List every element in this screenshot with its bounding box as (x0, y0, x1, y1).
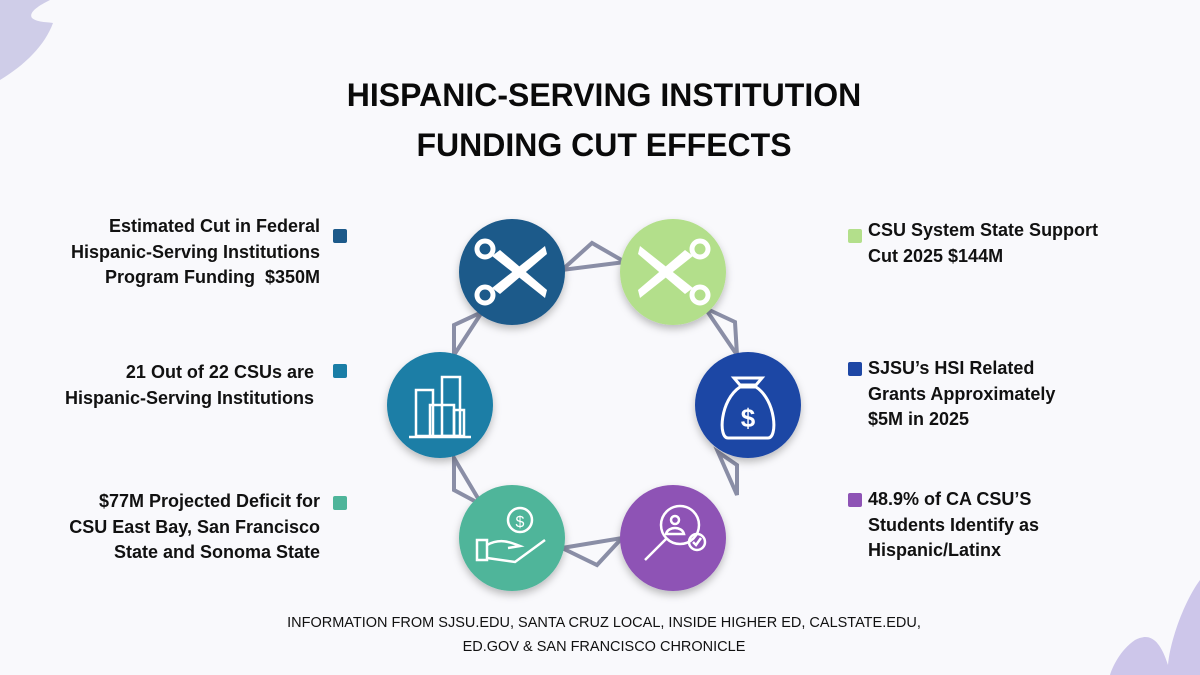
footer sources: INFORMATION FROM SJSU.EDU, SANTA CRUZ LOCAL, INSIDE HIGHER ED, CALSTATE.EDU, (287, 615, 921, 631)
right text 1: Cut 2025 $144M (868, 246, 1003, 266)
icon: magnifier profile (620, 485, 726, 591)
left text 2 (65, 362, 314, 408)
right text 2: $5M in 2025 (868, 409, 969, 429)
left text 1 (71, 216, 320, 287)
left text 3: State and Sonoma State (114, 542, 320, 562)
left text 1: Program Funding $350M (105, 267, 320, 287)
right text 2: SJSU’s HSI Related (868, 358, 1034, 378)
right text 1 (868, 220, 1098, 266)
left text 2: Hispanic-Serving Institutions (65, 388, 314, 408)
right text 3: 48.9% of CA CSU’S (868, 489, 1031, 509)
right text 1: CSU System State Support (868, 220, 1098, 240)
left text 1: Hispanic-Serving Institutions (71, 242, 320, 262)
icon: buildings (387, 352, 493, 458)
diagram: ring of icons: $ (741, 403, 756, 433)
right text 3: Hispanic/Latinx (868, 540, 1001, 560)
footer sources: ED.GOV & SAN FRANCISCO CHRONICLE (463, 639, 745, 655)
marker (848, 229, 862, 243)
title: FUNDING CUT EFFECTS (416, 127, 792, 163)
marker (333, 496, 347, 510)
marker (848, 362, 862, 376)
footer sources (287, 615, 921, 655)
left text 3 (69, 491, 320, 562)
connectors (454, 243, 737, 565)
left text 3: CSU East Bay, San Francisco (69, 516, 320, 536)
right text 3: Students Identify as (868, 514, 1039, 534)
icon: money bag (695, 352, 801, 458)
marker (333, 364, 347, 378)
title: HISPANIC-SERVING INSTITUTION (347, 77, 861, 113)
icon: scissors dark blue (459, 219, 565, 325)
marker (848, 493, 862, 507)
icon: scissors green (620, 219, 726, 325)
diagram: ring of icons: $ (516, 514, 525, 531)
icon: hand with coin (459, 485, 565, 591)
title (347, 77, 861, 163)
right text 2: Grants Approximately (868, 384, 1055, 404)
left text 2: 21 Out of 22 CSUs are (126, 362, 314, 382)
left text 3: $77M Projected Deficit for (99, 491, 320, 511)
left text 1: Estimated Cut in Federal (109, 216, 320, 236)
right text 3 (868, 489, 1039, 560)
marker (333, 229, 347, 243)
right text 2 (868, 358, 1056, 429)
